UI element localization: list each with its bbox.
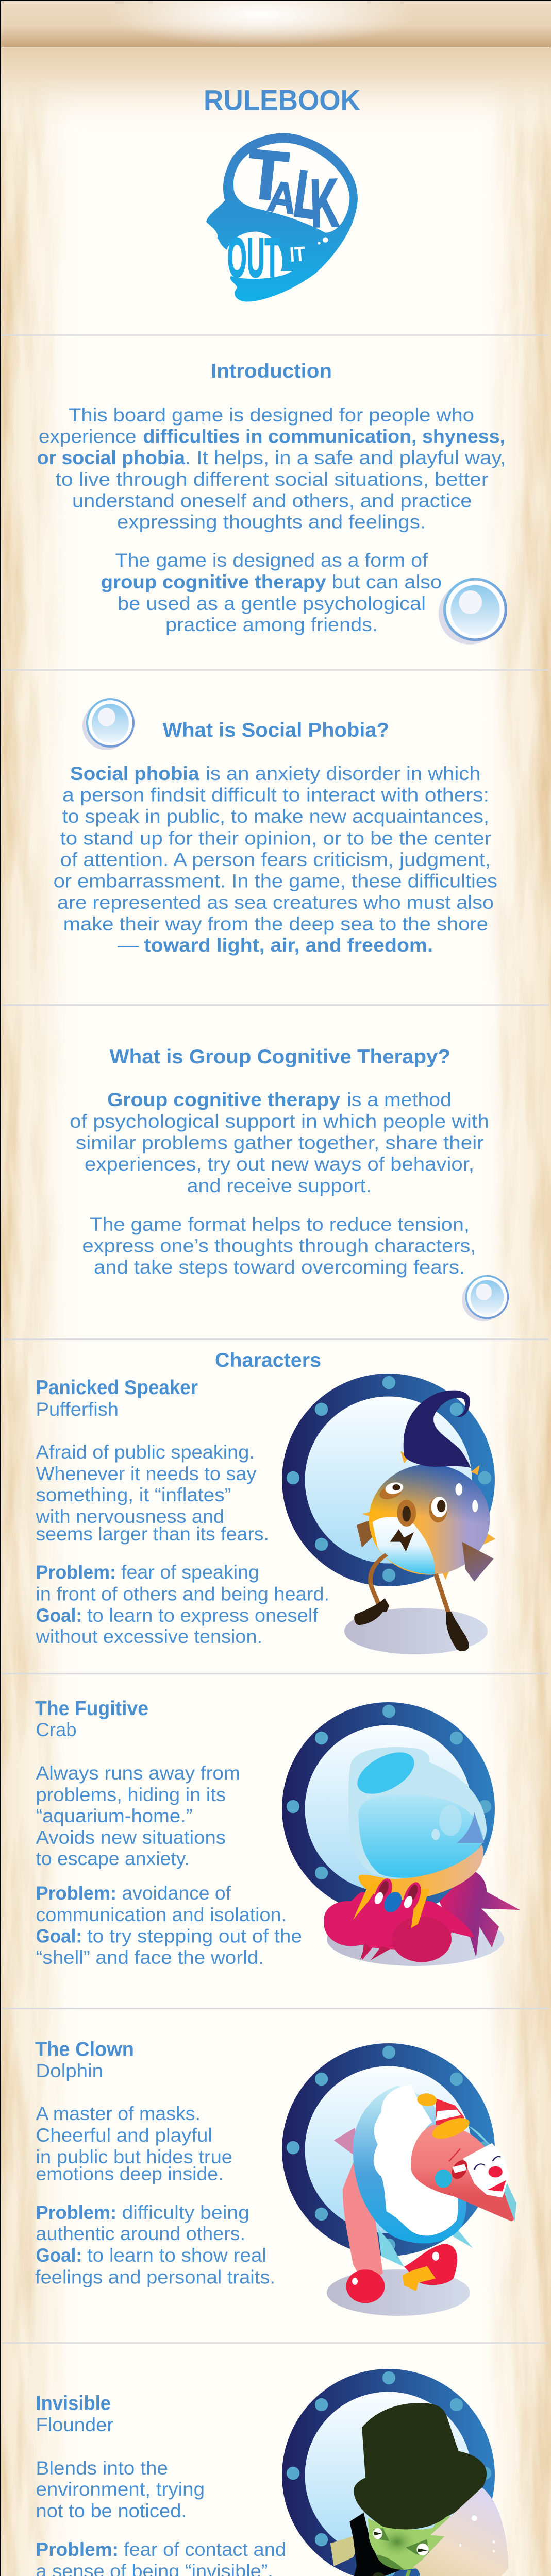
logo: Talk It Out head: K	[309, 165, 340, 241]
logo: Talk It Out head: A	[265, 172, 299, 224]
text: introduction body: expressing thoughts and feelings.	[117, 512, 426, 533]
logo: Talk It Out head: T	[243, 134, 291, 215]
icon: bubble	[439, 579, 506, 645]
text: Panicked Speaker: Panicked Speaker	[36, 1377, 198, 1399]
text: social phobia body: toward light, air, and freedom.	[144, 935, 433, 956]
text: The Clown: to learn to show real	[87, 2245, 266, 2266]
illustration: dolphin in porthole	[282, 2043, 516, 2316]
text: introduction body: practice among friends.	[165, 614, 378, 635]
text: Panicked Speaker: Goal:	[36, 1605, 82, 1626]
text: The Fugitive: to escape anxiety.	[36, 1848, 190, 1869]
text: The Clown: Goal:	[36, 2245, 82, 2266]
text: The Clown: Problem:	[36, 2202, 116, 2223]
text: introduction body	[37, 404, 506, 635]
text: The Fugitive: The Fugitive	[35, 1698, 148, 1720]
text: The Clown: Cheerful and playful	[36, 2125, 212, 2146]
text: The Fugitive	[35, 1698, 302, 1968]
text: group therapy body: Group cognitive therapy	[107, 1089, 340, 1110]
text: The Clown	[35, 2039, 275, 2287]
text: The Fugitive: Always runs away from	[36, 1762, 240, 1784]
text: Invisible: Problem:	[36, 2539, 119, 2560]
text: group therapy body: of psychological support in which people with	[70, 1111, 489, 1132]
text: The Clown: in public but hides true	[36, 2146, 232, 2167]
text: introduction body: The game is designed as a form of	[115, 550, 428, 571]
text: The Fugitive: Avoids new situations	[36, 1827, 226, 1848]
text: Panicked Speaker: Pufferfish	[36, 1399, 119, 1420]
text: Panicked Speaker: seems larger than its fears.	[36, 1523, 269, 1545]
text: social phobia body: or embarrassment. In the game, these difficulties	[54, 871, 497, 891]
text: Panicked Speaker: to learn to express oneself	[87, 1605, 319, 1626]
text: The Clown: A master of masks.	[36, 2103, 201, 2124]
text: The Fugitive: problems, hiding in its	[36, 1784, 226, 1805]
icon: bubble	[82, 699, 133, 750]
text: The Clown: feelings and personal traits.	[35, 2267, 275, 2287]
text: introduction body: experience	[39, 426, 136, 447]
text: introduction body: to live through different social situations, better	[56, 469, 488, 490]
text: The Fugitive: Crab	[36, 1719, 76, 1740]
text: social phobia body: of attention. A person fears criticism, judgment,	[60, 849, 491, 870]
illustration: flounder in porthole	[282, 2369, 508, 2576]
text: social phobia body: —	[118, 935, 139, 956]
text: The Clown: Dolphin	[36, 2060, 103, 2081]
text: social phobia body	[54, 763, 497, 956]
text: Panicked Speaker: Afraid of public speaking.	[36, 1442, 255, 1463]
panel: character Panicked Speaker	[35, 1374, 495, 1654]
text: Panicked Speaker: fear of speaking	[121, 1562, 259, 1583]
text: Invisible: fear of contact and	[124, 2539, 286, 2560]
text: introduction body: or social phobia	[37, 447, 185, 468]
text: The Clown: emotions deep inside.	[36, 2163, 224, 2184]
text: Invisible	[35, 2393, 302, 2576]
text: Panicked Speaker: something, it “inflates”	[36, 1484, 231, 1505]
text: introduction body: difficulties in communication, shyness,	[143, 426, 505, 447]
text: Panicked Speaker: Whenever it needs to say	[36, 1463, 257, 1484]
text: Invisible: environment, trying	[36, 2479, 205, 2500]
heading: what is group cognitive therapy: What is Group Cognitive Therapy?	[110, 1046, 450, 1068]
logo: Talk It Out head: L	[290, 156, 326, 233]
heading: introduction: Introduction	[211, 360, 332, 382]
text: introduction body: understand oneself and others, and practice	[72, 490, 472, 511]
text: The Fugitive: “shell” and face the world.	[36, 1947, 264, 1968]
panel: character The Clown	[35, 2039, 516, 2316]
text: Panicked Speaker	[35, 1377, 329, 1647]
text: group therapy body: is a method	[347, 1089, 452, 1110]
text: The Fugitive: avoidance of	[122, 1883, 231, 1904]
panel: what is social phobia	[54, 699, 497, 956]
top scroll bar	[0, 0, 551, 47]
text: introduction body: This board game is designed for people who	[69, 404, 474, 426]
text: Panicked Speaker: Problem:	[36, 1562, 116, 1583]
text: Panicked Speaker: with nervousness and	[35, 1506, 224, 1527]
text: Invisible: Flounder	[36, 2414, 113, 2435]
text: social phobia body: are represented as sea creatures who must also	[57, 892, 494, 913]
panel: introduction	[37, 360, 506, 645]
text: The Fugitive: to try stepping out of the	[87, 1926, 302, 1947]
panel: what is group cognitive therapy	[70, 1046, 508, 1321]
text: social phobia body: to speak in public, to make new acquaintances,	[62, 806, 489, 827]
text: social phobia body: Social phobia	[70, 763, 199, 784]
text: Invisible: Blends into the	[36, 2458, 168, 2479]
text: The Clown: authentic around others.	[36, 2223, 245, 2244]
icon: bubble	[462, 1276, 508, 1321]
text: introduction body: but can also	[332, 571, 442, 592]
text: The Fugitive: “aquarium-home.”	[36, 1805, 193, 1826]
text: introduction body: be used as a gentle psychological	[118, 593, 426, 614]
text: social phobia body: is an anxiety disorder in which	[206, 763, 480, 784]
text: The Fugitive: Goal:	[36, 1926, 82, 1947]
title: RULEBOOK	[204, 83, 360, 116]
panel: character Invisible	[35, 2369, 508, 2576]
text: group therapy body: and receive support.	[187, 1175, 371, 1196]
logo: Talk It Out head: IT	[289, 243, 306, 266]
text: social phobia body: to stand up for their opinion, or to be the center	[60, 827, 491, 849]
text: The Clown: The Clown	[35, 2039, 134, 2061]
text: Panicked Speaker: without excessive tension.	[35, 1626, 262, 1647]
text: introduction body: . It helps, in a safe and playful way,	[185, 447, 506, 468]
heading: characters: Characters	[215, 1349, 321, 1371]
text: group therapy body: and take steps toward overcoming fears.	[94, 1257, 465, 1278]
panel: character The Fugitive	[35, 1698, 520, 1968]
text: group therapy body: similar problems gather together, share their	[76, 1132, 484, 1153]
illustration: pufferfish in porthole	[282, 1374, 495, 1654]
text: group therapy body	[70, 1089, 489, 1278]
logo: Talk It Out head: OUT	[227, 227, 280, 289]
text: The Fugitive: Problem:	[36, 1883, 116, 1904]
text: group therapy body: The game format helps to reduce tension,	[90, 1214, 470, 1235]
text: Panicked Speaker: in front of others and being heard.	[36, 1584, 329, 1604]
text: The Fugitive: communication and isolation.	[36, 1904, 287, 1925]
logo: Talk It Out head	[206, 133, 358, 302]
text: social phobia body: make their way from the deep sea to the shore	[63, 913, 488, 935]
illustration: crab in porthole	[282, 1702, 520, 1966]
text: The Clown: difficulty being	[122, 2202, 249, 2223]
text: group therapy body: express one’s thoughts through characters,	[82, 1235, 476, 1256]
text: Invisible: Invisible	[36, 2393, 111, 2414]
heading: what is social phobia: What is Social Phobia?	[163, 719, 389, 741]
text: introduction body: group cognitive therapy	[101, 571, 326, 592]
text: social phobia body: a person findsit difficult to interact with others:	[62, 784, 489, 806]
text: Invisible: not to be noticed.	[36, 2500, 187, 2521]
text: group therapy body: experiences, try out new ways of behavior,	[85, 1154, 474, 1175]
